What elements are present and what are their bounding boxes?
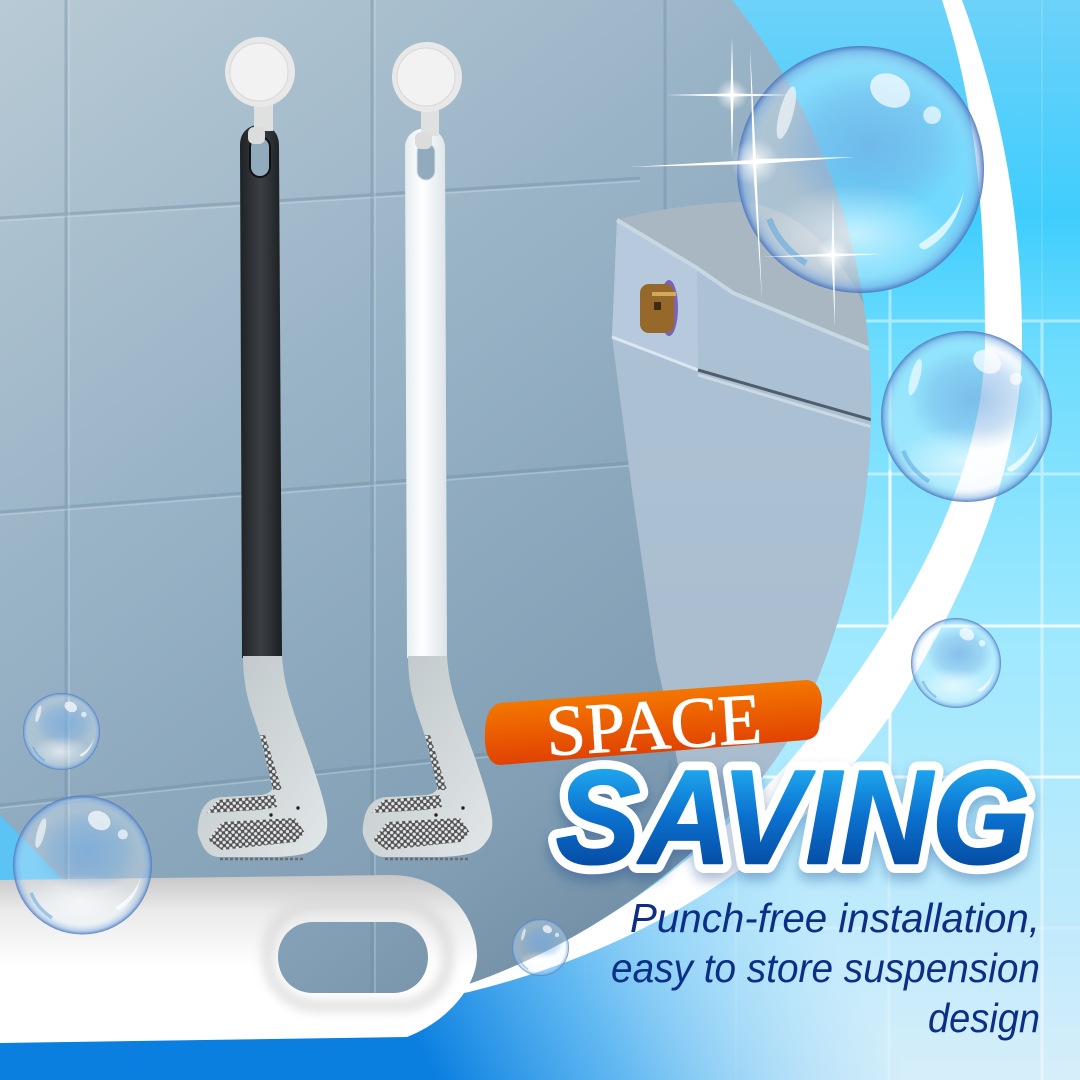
heading: SAVING: SAVING (556, 744, 1030, 892)
description text (611, 895, 1040, 1041)
wall hook: right (392, 42, 462, 149)
orange label with SPACE (485, 678, 822, 772)
bubble: left upper (23, 693, 100, 770)
sparkles (630, 37, 883, 327)
wall hook: left (225, 37, 295, 144)
bubble: bottom centre (512, 919, 569, 976)
panel: bathroom photo (0, 0, 871, 993)
brush: white (363, 128, 492, 859)
description text: Punch-free installation, (630, 895, 1040, 941)
description text: design (928, 995, 1040, 1041)
white curved band (380, 0, 1022, 1010)
blue triangle corner (0, 815, 63, 880)
toilet tank (612, 202, 871, 820)
bubble: right small (911, 618, 1001, 708)
orange label with SPACE: SPACE (543, 678, 764, 772)
description text: easy to store suspension (611, 945, 1040, 991)
brass fitting (640, 280, 678, 336)
heading: SAVING: SAVING (556, 744, 1030, 892)
brush: black (198, 125, 327, 859)
bubble: left lower (13, 796, 152, 934)
heading: SAVING: SAVING (556, 751, 1030, 899)
bubble: large top (737, 46, 984, 293)
bottom blue gradient (0, 800, 1080, 1080)
bubble: right middle (881, 331, 1052, 502)
foreground handle close-up (0, 875, 477, 1043)
